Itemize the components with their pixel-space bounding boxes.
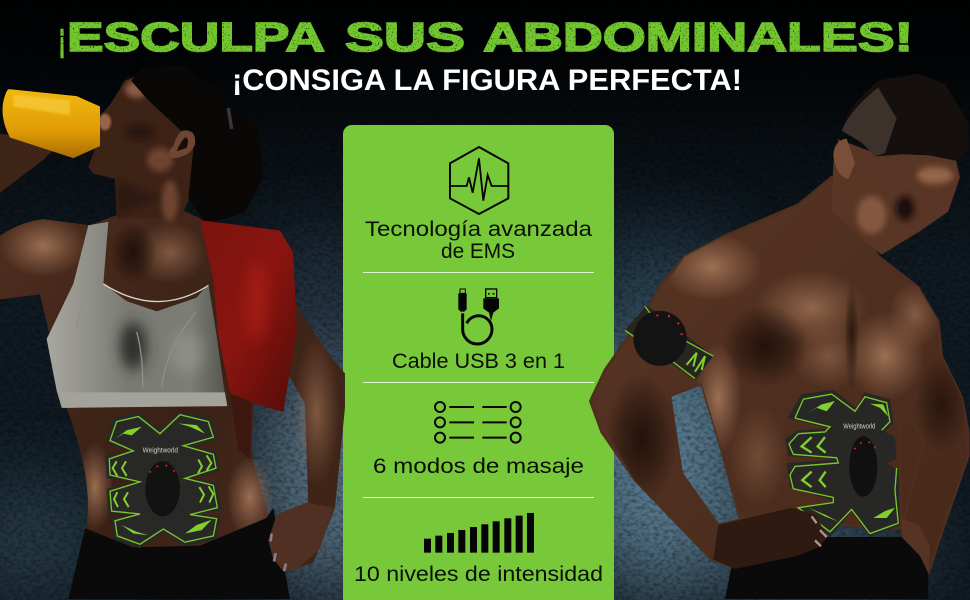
title <box>59 14 913 60</box>
shaker bottle <box>2 89 100 158</box>
title: SUS <box>345 14 465 60</box>
black shorts <box>68 508 290 599</box>
man hand on hip <box>713 508 930 573</box>
icon: intensity bars <box>424 513 534 553</box>
armband stimulator <box>625 305 713 380</box>
red towel <box>200 220 297 460</box>
man body and arms <box>590 177 968 573</box>
abs stimulator pad: Weightworld <box>843 423 876 431</box>
text: Tecnología avanzada de EMS: Tecnología avanzada <box>365 218 592 241</box>
woman hand on hip <box>268 503 333 571</box>
sports bra <box>47 222 227 408</box>
text: 10 niveles de intensidad: 10 niveles de intensidad <box>354 563 603 586</box>
title: ESCULPA <box>67 14 325 60</box>
title: ¡ <box>59 14 65 60</box>
woman hair <box>133 67 262 222</box>
text: Tecnología avanzada de EMS <box>365 218 592 263</box>
text: Tecnología avanzada de EMS: de EMS <box>441 240 515 263</box>
woman body <box>0 179 345 597</box>
icon: massage modes <box>435 402 521 443</box>
text: 6 modos de masaje: 6 modos de masaje <box>373 455 584 478</box>
man hair <box>842 74 968 161</box>
black shorts <box>725 537 928 599</box>
figure: woman drinking from shaker <box>0 67 345 599</box>
panel: features background <box>343 125 614 600</box>
text: Cable USB 3 en 1: Cable USB 3 en 1 <box>392 350 565 373</box>
man head <box>832 139 960 255</box>
abs stimulator pad <box>105 411 222 548</box>
icon: hexagon with heartbeat <box>450 147 508 214</box>
abs stimulator pad <box>785 390 900 537</box>
woman head <box>88 72 200 222</box>
woman hand on shaker <box>0 134 63 193</box>
abs stimulator pad: Weightworld <box>143 448 178 455</box>
title: ABDOMINALES! <box>483 14 913 60</box>
icon: USB cable <box>458 289 499 344</box>
figure: man looking at abs <box>590 74 968 599</box>
subtitle: ¡CONSIGA LA FIGURA PERFECTA! <box>232 64 742 97</box>
